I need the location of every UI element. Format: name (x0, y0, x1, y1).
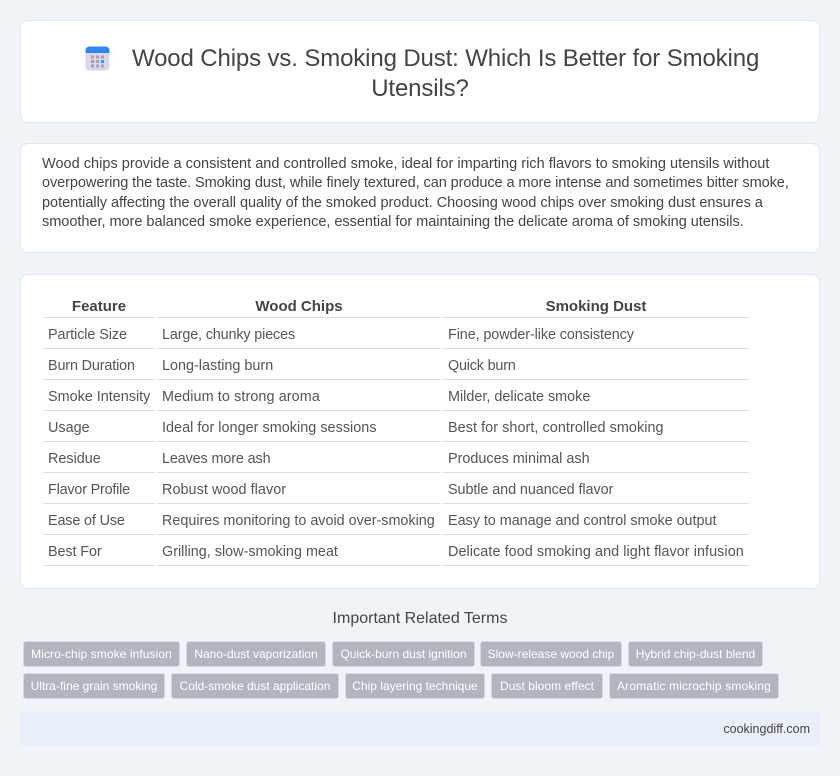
table: Smoke Intensity (48, 389, 150, 405)
table: Flavor Profile (48, 482, 130, 498)
table: Particle Size (48, 327, 127, 343)
header card (20, 20, 820, 123)
footer credit: cookingdiff.com (723, 722, 810, 736)
table: Milder, delicate smoke (448, 389, 590, 405)
intro text: smoother, more balanced smoke experience, essential for maintaining the delicate aroma of smoking utensils. (42, 214, 744, 230)
related terms tags: Hybrid chip-dust blend (636, 647, 755, 661)
intro paragraph panel (20, 143, 820, 253)
table: Robust wood flavor (162, 482, 286, 498)
table: Ease of Use (48, 513, 125, 529)
table: Usage (48, 420, 90, 436)
table: Wood Chips (255, 298, 343, 315)
related terms tags: Cold-smoke dust application (180, 679, 330, 693)
table: Subtle and nuanced flavor (448, 482, 613, 498)
intro text: potentially affecting the overall quality of the smoked product. Choosing wood chips over smoking dust ensures a (42, 195, 763, 211)
table: Burn Duration (48, 358, 135, 374)
table: Leaves more ash (162, 451, 270, 467)
related terms tags: Aromatic microchip smoking (617, 679, 771, 693)
table: Residue (48, 451, 101, 467)
title (132, 45, 759, 102)
comparison table panel (20, 274, 820, 589)
related terms tags: Dust bloom effect (500, 679, 594, 693)
table: Medium to strong aroma (162, 389, 320, 405)
table: Produces minimal ash (448, 451, 590, 467)
intro text (42, 156, 789, 230)
table: Ideal for longer smoking sessions (162, 420, 377, 436)
table (43, 298, 749, 566)
table: Delicate food smoking and light flavor infusion (448, 544, 744, 560)
table: Best for short, controlled smoking (448, 420, 664, 436)
related terms tags: Slow-release wood chip (488, 647, 614, 661)
related terms tags: Ultra-fine grain smoking (31, 679, 157, 693)
related terms tags: Quick-burn dust ignition (340, 647, 467, 661)
table: Requires monitoring to avoid over-smoking (162, 513, 435, 529)
intro text: overpowering the taste. Smoking dust, while finely textured, can produce a more intense and sometimes bitter smoke, (42, 175, 789, 191)
related terms tags: Nano-dust vaporization (194, 647, 318, 661)
icon: calendar (86, 46, 110, 70)
related terms tags: Micro-chip smoke infusion (31, 647, 172, 661)
related terms tags (23, 641, 779, 699)
table: Quick burn (448, 358, 516, 374)
table: Smoking Dust (546, 298, 646, 315)
title: Wood Chips vs. Smoking Dust: Which Is Better for Smoking (132, 45, 759, 72)
table: Grilling, slow-smoking meat (162, 544, 338, 560)
table: Best For (48, 544, 102, 560)
title: Utensils? (371, 75, 469, 102)
table: Large, chunky pieces (162, 327, 295, 343)
related terms tags: Chip layering technique (352, 679, 478, 693)
table: Long-lasting burn (162, 358, 273, 374)
footer bar (20, 712, 820, 746)
table: Fine, powder-like consistency (448, 327, 634, 343)
table: Feature (72, 298, 126, 315)
intro text: Wood chips provide a consistent and controlled smoke, ideal for imparting rich flavors to smoking utensils without (42, 156, 769, 172)
related terms heading: Important Related Terms (333, 610, 507, 627)
table: Easy to manage and control smoke output (448, 513, 716, 529)
